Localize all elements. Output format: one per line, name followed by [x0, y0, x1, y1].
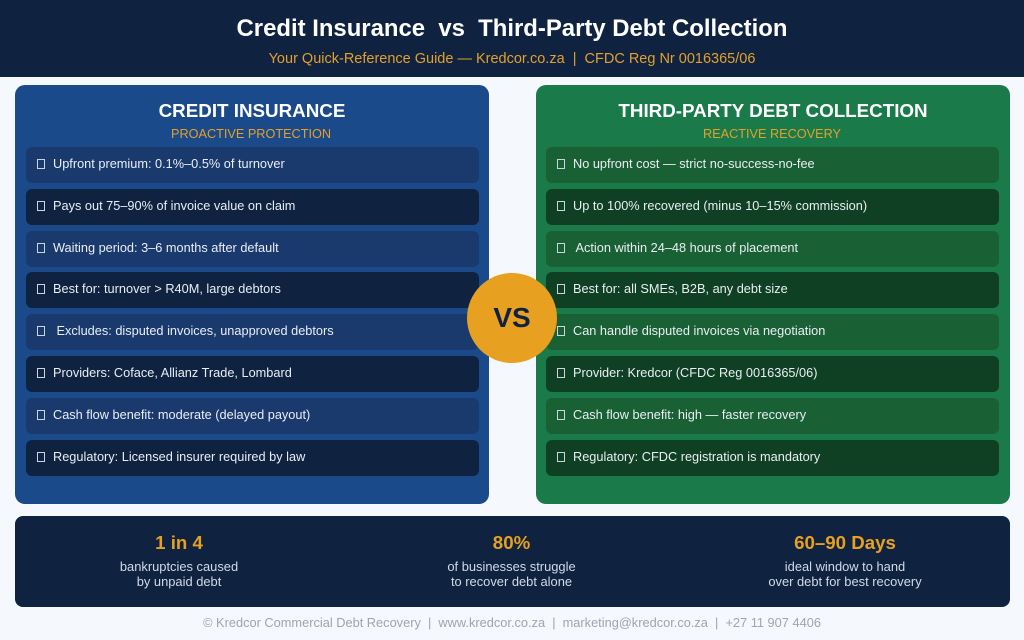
row: disputed — [546, 314, 999, 350]
row: excludes — [26, 314, 479, 350]
footer: © Kredcor Commercial Debt Recovery | www.kredcor.co.za | marketing@kredcor.co.za | +27 11 907 4406 — [203, 615, 821, 630]
stat: window: 60–90 Days — [794, 532, 896, 553]
row: upfront cost — [546, 147, 999, 183]
row: provider: Provider: Kredcor (CFDC Reg 0016365/06) — [573, 365, 818, 380]
stat: bankruptcies — [120, 532, 238, 589]
row: recovered: Up to 100% recovered (minus 10–15% commission) — [573, 198, 867, 213]
title: Credit Insurance vs Third-Party Debt Collection — [237, 14, 787, 42]
row: regulatory — [546, 440, 999, 476]
stats band — [15, 516, 1010, 607]
row: providers: Providers: Coface, Allianz Trade, Lombard — [53, 365, 292, 380]
row: action — [546, 231, 999, 267]
row: best for — [546, 272, 999, 308]
row: recovered — [546, 189, 999, 225]
row: disputed: Can handle disputed invoices via negotiation — [573, 323, 825, 338]
row: cash flow — [546, 398, 999, 434]
vs badge: VS — [493, 302, 531, 333]
stat: window: ideal window to hand over debt for best recovery — [768, 559, 922, 589]
panel: credit insurance — [15, 85, 489, 504]
stat: businesses: 80% — [493, 532, 530, 553]
row: cash flow: Cash flow benefit: high — faster recovery — [573, 407, 806, 422]
row: regulatory: Regulatory: CFDC registration is mandatory — [573, 449, 820, 464]
header band — [0, 0, 1024, 77]
row: payout — [26, 189, 479, 225]
row: payout: Pays out 75–90% of invoice value on claim — [53, 198, 295, 213]
stat: window — [768, 532, 922, 589]
row: provider — [546, 356, 999, 392]
row: premium — [26, 147, 479, 183]
row: best for: Best for: all SMEs, B2B, any debt size — [573, 281, 788, 296]
row: action: Action within 24–48 hours of placement — [576, 240, 798, 255]
panel subheading: REACTIVE RECOVERY — [703, 127, 841, 141]
subtitle: Your Quick-Reference Guide — Kredcor.co.za | CFDC Reg Nr 0016365/06 — [269, 51, 755, 67]
vs badge — [467, 273, 557, 363]
panel heading: CREDIT INSURANCE — [159, 100, 345, 120]
row: best for — [26, 272, 479, 308]
row: cash flow — [26, 398, 479, 434]
panel subheading: PROACTIVE PROTECTION — [171, 127, 331, 141]
panel: third-party debt collection — [536, 85, 1010, 504]
panel heading: THIRD-PARTY DEBT COLLECTION — [618, 100, 928, 120]
stat: bankruptcies: bankruptcies caused by unpaid debt — [120, 559, 238, 589]
row: premium: Upfront premium: 0.1%–0.5% of turnover — [53, 156, 285, 171]
row: best for: Best for: turnover > R40M, large debtors — [53, 281, 281, 296]
row: waiting period: Waiting period: 3–6 months after default — [53, 240, 279, 255]
stat: businesses — [447, 532, 576, 589]
row: regulatory: Regulatory: Licensed insurer required by law — [53, 449, 305, 464]
stat: businesses: of businesses struggle to recover debt alone — [447, 559, 576, 589]
row: waiting period — [26, 231, 479, 267]
row: regulatory — [26, 440, 479, 476]
row: excludes: Excludes: disputed invoices, unapproved debtors — [56, 323, 334, 338]
row: cash flow: Cash flow benefit: moderate (delayed payout) — [53, 407, 310, 422]
row: upfront cost: No upfront cost — strict no-success-no-fee — [573, 156, 815, 171]
row: providers — [26, 356, 479, 392]
stat: bankruptcies: 1 in 4 — [155, 532, 203, 553]
